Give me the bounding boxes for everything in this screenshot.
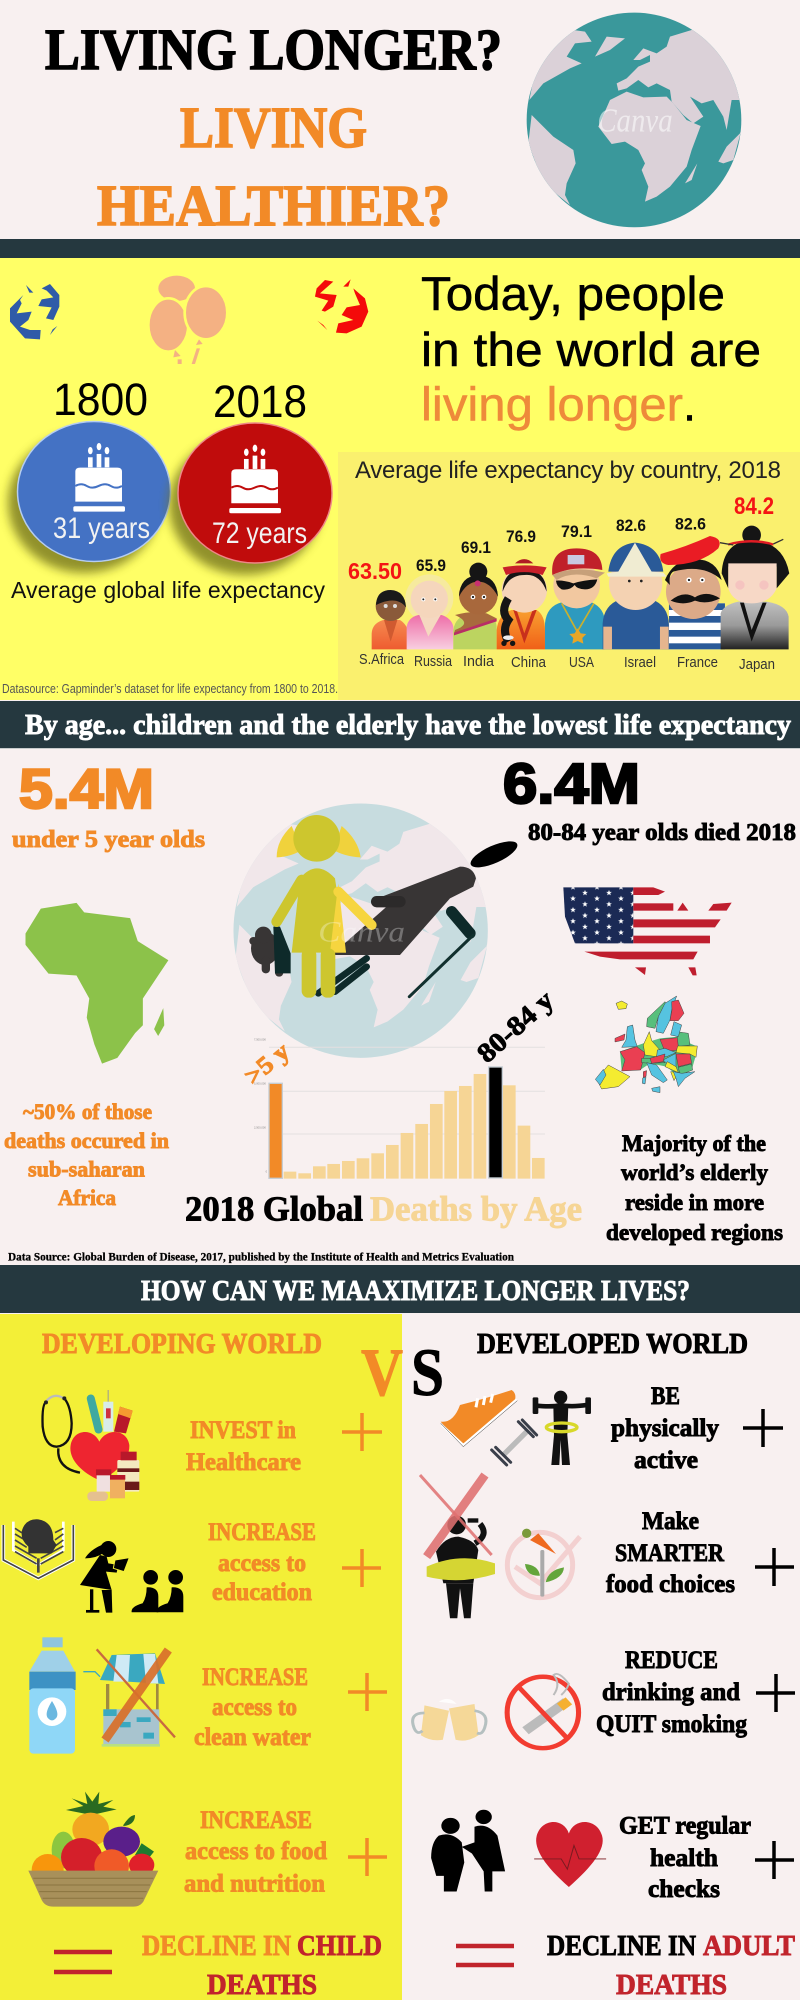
versus: [361, 1334, 444, 1410]
headline: today people are living longer: .: [683, 378, 696, 430]
country labels: Israel: [624, 654, 656, 671]
text: increase access to education: education: [212, 1579, 312, 1606]
teddy bear: [249, 927, 291, 977]
title: LIVING LONGER?: [45, 17, 502, 82]
result: decline in child deaths: [142, 1930, 382, 2000]
title: [45, 17, 502, 238]
stat: 5.4M: 5.4M: [19, 757, 154, 820]
heading: DEVELOPING WORLD: [42, 1328, 322, 1360]
bar label: under 5: >5 y: [240, 1037, 296, 1091]
illustration: globe with child and elderly: [233, 803, 521, 1058]
text: invest in healthcare: [186, 1417, 301, 1476]
person: India: [453, 563, 498, 649]
map: USA flag: [563, 887, 732, 975]
plus: smoking: [756, 1674, 795, 1712]
text: make smarter food choices: Make: [642, 1508, 699, 1535]
chart title: 2018 Global: [185, 1190, 363, 1228]
heading band: how can we maximize longer lives: HOW CAN WE MAAXIMIZE LONGER LIVES?: [141, 1276, 690, 1307]
icon: blue confetti: [10, 284, 59, 339]
values: 63.50: [348, 558, 402, 584]
values: 82.6: [616, 516, 646, 535]
text: elderly regions: world’s elderly: [621, 1160, 768, 1185]
headline: today people are living longer: living longer: [421, 378, 683, 430]
text: share of deaths in Africa: ~50% of those: [23, 1099, 152, 1124]
person: South Africa: [372, 590, 408, 649]
text: elderly regions: [606, 1131, 783, 1245]
plus: active: [743, 1409, 783, 1447]
text: elderly regions: developed regions: [606, 1220, 783, 1245]
text: be physically active: [611, 1383, 719, 1474]
people illustration: [372, 526, 789, 649]
plus: checks: [755, 1841, 794, 1879]
text: be physically active: active: [634, 1447, 698, 1474]
text: get regular health checks: GET regular: [619, 1812, 751, 1840]
section: deaths by age: [4, 752, 796, 1264]
panel: life expectancy by country: [338, 452, 800, 700]
result: decline in adult deaths: ADULT: [703, 1930, 795, 1962]
year 2018: 2018: [213, 376, 307, 427]
panel: developing world: [0, 1314, 402, 2000]
text: share of deaths in Africa: [4, 1099, 169, 1210]
badge: 1800 life expectancy: [8, 422, 170, 573]
label: 80-84 year olds died 2018: 80-84 year olds died 2018: [528, 820, 796, 846]
versus: S: [411, 1334, 444, 1410]
text: share of deaths in Africa: Africa: [58, 1185, 116, 1210]
text: be physically active: physically: [611, 1415, 719, 1442]
chart title: Deaths by Age: [370, 1190, 582, 1228]
equals: child deaths: [54, 1952, 112, 1972]
country labels: Russia: [414, 653, 453, 670]
icon: globe: Canva: [597, 103, 673, 140]
text: share of deaths in Africa: sub-saharan: [28, 1156, 145, 1182]
result: decline in adult deaths: [547, 1930, 795, 2000]
band: [0, 239, 800, 258]
bar label: 80-84: 80-84 y: [471, 984, 560, 1068]
data source: Datasource: Gapminder’s dataset for life expectancy from 1800 to 2018.: [2, 681, 338, 696]
text: reduce drinking and quit smoking: QUIT smoking: [596, 1711, 747, 1738]
text: reduce drinking and quit smoking: [596, 1647, 747, 1738]
map: Africa: [26, 903, 168, 1064]
illustration: globe with child and elderly: Canva: [318, 916, 405, 949]
bar chart: global deaths by age: 2,500,000: [254, 1126, 266, 1130]
icon: health checks: [431, 1810, 606, 1891]
headline: today people are living longer: in the world are: [421, 323, 761, 376]
text: increase access to clean water: clean water: [194, 1724, 311, 1751]
text: increase access to education: INCREASE: [208, 1519, 316, 1546]
icon: healthcare: [42, 1390, 139, 1501]
text: get regular health checks: health: [650, 1845, 718, 1872]
bar chart: global deaths by age: 5,000,000: [254, 1081, 266, 1085]
text: share of deaths in Africa: deaths occured in: [4, 1128, 169, 1153]
elderly shadow: [318, 836, 521, 997]
values: 65.9: [416, 556, 446, 575]
text: reduce drinking and quit smoking: REDUCE: [625, 1647, 718, 1674]
text: invest in healthcare: Healthcare: [186, 1449, 301, 1476]
headline: today people are living longer: Today, people: [421, 267, 725, 320]
caption: average global life expectancy: Average global life expectancy: [11, 577, 326, 603]
text: increase access to food and nutrition: INCREASE: [200, 1807, 312, 1834]
values: 76.9: [506, 527, 536, 546]
text: increase access to clean water: access to: [212, 1694, 297, 1721]
result: decline in child deaths: DECLINE IN: [142, 1930, 291, 1962]
badge: 1800 life expectancy: 31 years: [53, 512, 150, 545]
values: 69.1: [461, 538, 491, 557]
plus: clean water: [348, 1673, 387, 1711]
icon: exercise: [420, 1390, 591, 1618]
bar chart: global deaths by age: 0: [266, 1170, 268, 1174]
heading band: how can we maximize longer lives: [0, 1265, 800, 1313]
text: increase access to education: [208, 1519, 316, 1606]
headline: today people are living longer: [421, 267, 761, 430]
label: under 5 year olds: under 5 year olds: [12, 827, 205, 853]
country labels: S.Africa: [359, 651, 405, 668]
text: make smarter food choices: SMARTER: [615, 1540, 725, 1567]
person: Japan: [720, 526, 789, 649]
title: LIVING: [180, 95, 367, 160]
title: HEALTHIER?: [97, 173, 450, 238]
person: France: [660, 536, 725, 649]
plus: education: [342, 1549, 381, 1587]
heading band: by age: [0, 701, 800, 749]
text: elderly regions: reside in more: [625, 1190, 764, 1215]
text: get regular health checks: checks: [648, 1876, 720, 1903]
country labels: USA: [569, 654, 594, 671]
values: 84.2: [734, 493, 774, 520]
chart title: [185, 1190, 582, 1228]
text: increase access to clean water: INCREASE: [202, 1664, 308, 1691]
heading: DEVELOPED WORLD: [477, 1328, 748, 1360]
values: 82.6: [675, 514, 706, 534]
country labels: [359, 651, 775, 673]
plus: healthcare: [342, 1413, 382, 1451]
versus: V: [361, 1334, 403, 1410]
icon: red confetti: [315, 279, 368, 333]
text: increase access to food and nutrition: and nutrition: [184, 1870, 325, 1898]
icon: education: [3, 1519, 183, 1613]
icon: globe: [527, 13, 743, 227]
person: China: [497, 559, 547, 649]
text: invest in healthcare: INVEST in: [190, 1417, 296, 1444]
text: elderly regions: Majority of the: [622, 1131, 766, 1156]
badge: 2018 life expectancy: [169, 423, 332, 575]
icon: clean water: [29, 1637, 175, 1754]
section: header: [45, 13, 743, 238]
icon: balloons: [148, 276, 227, 364]
person: USA: [545, 548, 605, 649]
panel: living longer: [0, 258, 800, 700]
text: increase access to education: access to: [218, 1550, 306, 1577]
plus: food: [348, 1838, 387, 1876]
text: be physically active: BE: [651, 1383, 680, 1410]
panel: developed world: [413, 1328, 795, 2000]
text: increase access to clean water: [194, 1664, 311, 1751]
person: Israel: [603, 543, 669, 649]
text: reduce drinking and quit smoking: drinking and: [602, 1679, 740, 1706]
text: get regular health checks: [619, 1812, 751, 1903]
country labels: Japan: [739, 656, 775, 673]
text: increase access to food and nutrition: access to food: [185, 1838, 327, 1865]
country labels: India: [463, 653, 495, 670]
heading band: by age: By age... children and the elderly have the lowest life expectancy: [25, 709, 791, 741]
text: increase access to food and nutrition: [184, 1807, 327, 1898]
year 1800: 1800: [53, 374, 148, 425]
badge: 2018 life expectancy: 72 years: [212, 517, 307, 550]
bar chart: global deaths by age: 7,500,000: [254, 1038, 266, 1042]
text: make smarter food choices: food choices: [606, 1571, 735, 1598]
bar chart: global deaths by age: [254, 1038, 545, 1179]
country labels: France: [677, 654, 718, 671]
plus: food: [755, 1548, 794, 1586]
icon: fruit basket: [28, 1792, 158, 1907]
person: Russia: [405, 574, 453, 649]
icon: drinking and smoking: [413, 1674, 579, 1748]
girl: [277, 815, 372, 998]
country labels: China: [511, 654, 547, 671]
result: decline in adult deaths: DECLINE IN: [547, 1930, 696, 1962]
map: Europe: [595, 996, 697, 1093]
stat: 6.4M: 6.4M: [503, 752, 640, 816]
data source: Data Source: Global Burden of Disease, 2017, published by the Institute of Health and Metrics Evaluation: [8, 1250, 514, 1264]
text: make smarter food choices: [606, 1508, 735, 1598]
result: decline in child deaths: CHILD: [297, 1930, 382, 1962]
values: [348, 493, 774, 584]
chart title: Average life expectancy by country, 2018: [355, 457, 781, 484]
values: 79.1: [561, 522, 592, 541]
equals: adult deaths: [456, 1946, 514, 1965]
